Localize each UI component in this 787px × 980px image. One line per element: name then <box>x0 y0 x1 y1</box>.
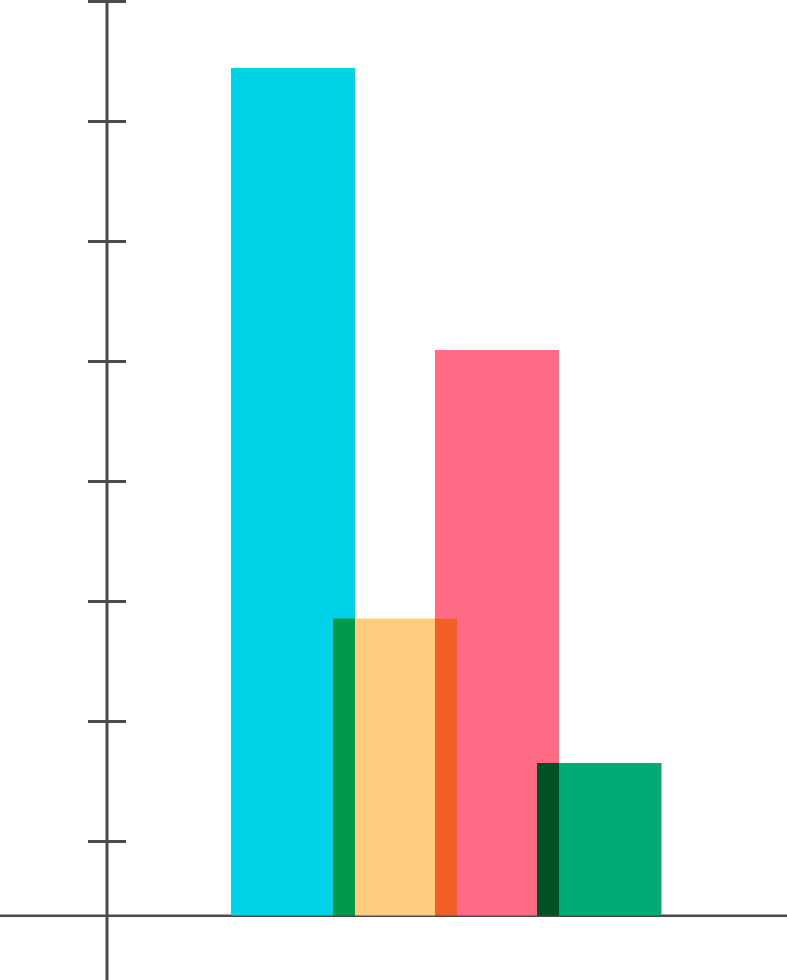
x axis <box>0 914 787 917</box>
bar body: green <box>559 763 662 916</box>
overlap: deep orange <box>435 618 457 916</box>
bar: green <box>537 763 662 916</box>
overlap: dark green <box>537 763 559 916</box>
overlap: green <box>333 618 355 916</box>
y axis with tick marks <box>88 0 126 980</box>
bar: orange <box>333 618 457 916</box>
bar: pink <box>435 350 559 916</box>
bar: cyan <box>231 68 355 916</box>
bar body: light orange <box>355 618 435 916</box>
